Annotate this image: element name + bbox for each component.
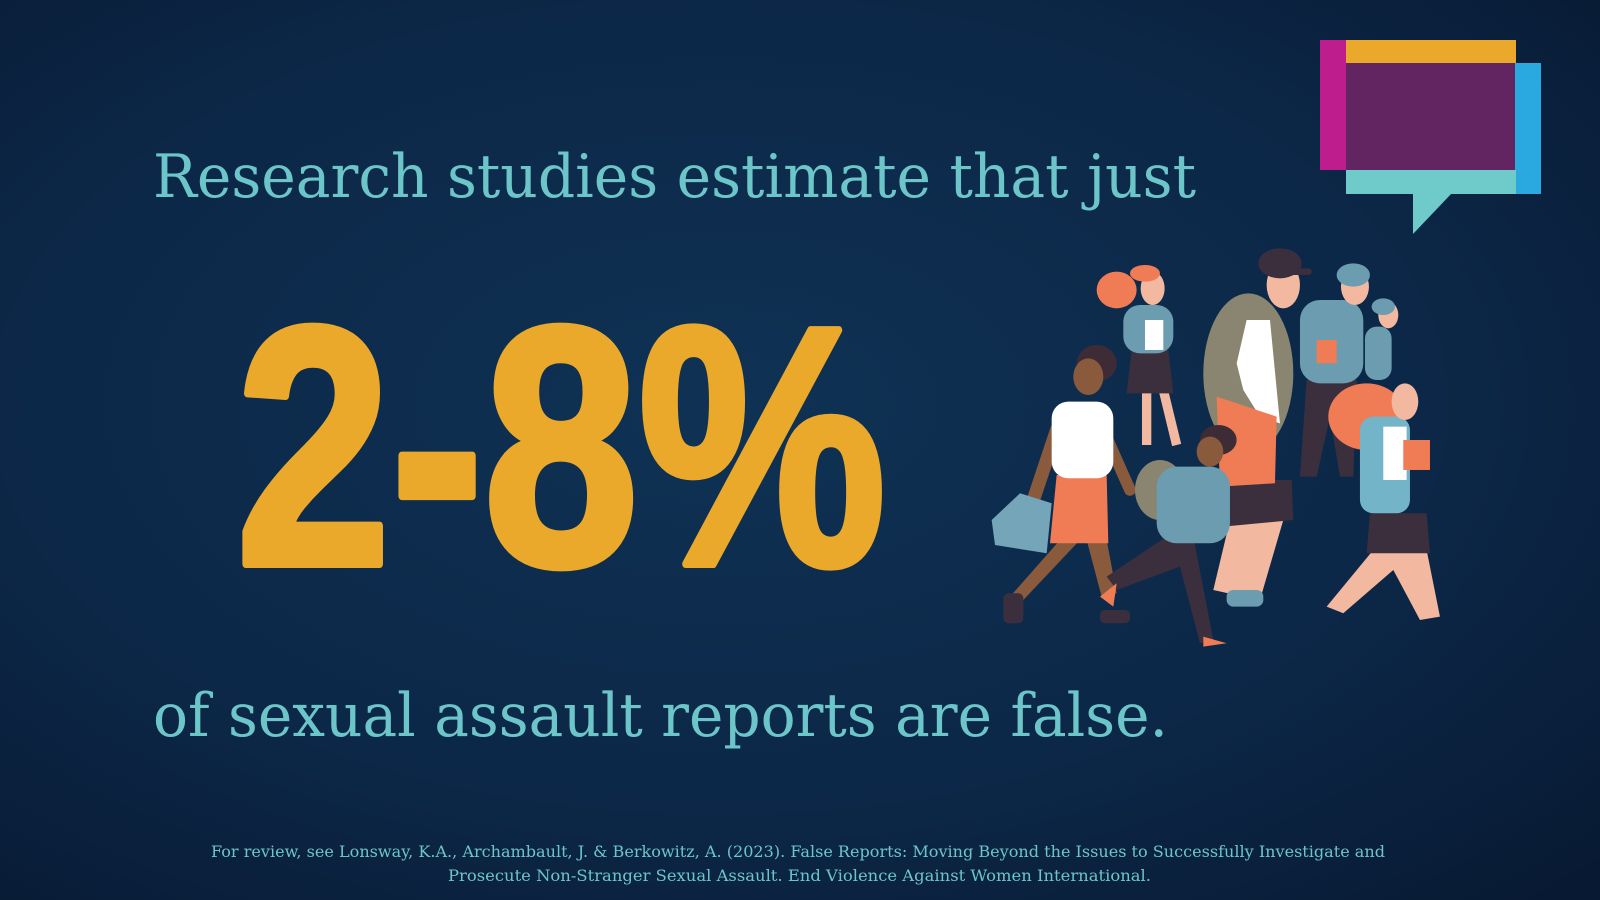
footer citation	[211, 842, 1385, 885]
big statistic: 2-8%	[236, 257, 886, 637]
footer citation: Prosecute Non-Stranger Sexual Assault. End Violence Against Women International.	[448, 866, 1151, 885]
person: tall man	[1203, 248, 1312, 607]
person: right man	[1300, 263, 1370, 477]
person: teacher girl	[1097, 265, 1177, 445]
person: left woman	[992, 345, 1130, 623]
person: running child	[1100, 425, 1237, 647]
logo: speech bubble	[1320, 40, 1541, 234]
person: small boy	[1365, 298, 1398, 380]
footer citation: For review, see Lonsway, K.A., Archambault, J. & Berkowitz, A. (2023). False Reports: Moving Beyond the Issues to Successfully Investigate and	[211, 842, 1385, 861]
illustration: people walking	[992, 248, 1440, 647]
heading: top line: Research studies estimate that just	[153, 142, 1196, 212]
heading: bottom line: of sexual assault reports are false.	[153, 681, 1168, 751]
person: right girl	[1327, 383, 1440, 620]
